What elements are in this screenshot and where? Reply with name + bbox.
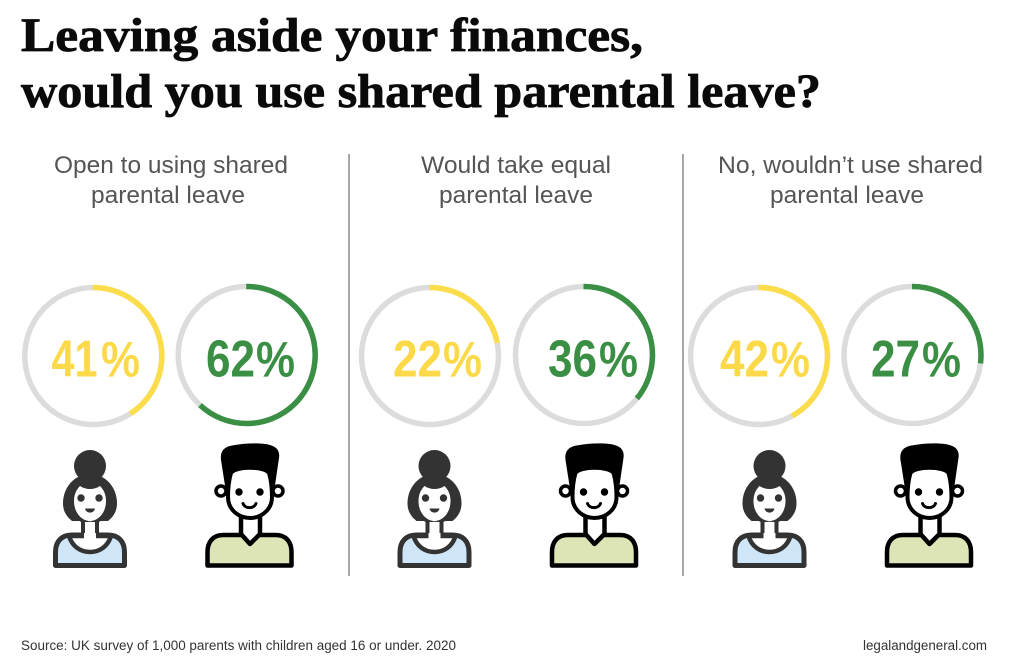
heading: wouldn't use: parental leave — [770, 182, 924, 209]
website: legalandgeneral.com — [863, 638, 987, 653]
panel: open to using shared parental leave — [25, 152, 315, 566]
donut: men 62% — [178, 286, 315, 424]
heading: equal leave: parental leave — [439, 182, 593, 209]
donut: women 42% — [690, 288, 828, 424]
panel: would not use shared parental leave — [690, 152, 983, 566]
heading: open to using: parental leave — [91, 182, 245, 209]
donut: men 36% — [516, 286, 652, 424]
donut: men 62%: 62 — [206, 330, 255, 388]
donut: men 27% — [844, 286, 981, 424]
icon: woman — [400, 450, 469, 566]
donut: men 36%: 36 — [548, 330, 597, 388]
donut: women 22%: % — [443, 332, 482, 388]
icon: man — [887, 443, 971, 566]
panel: would take equal parental leave — [362, 152, 652, 566]
heading: wouldn't use: No, wouldn’t use shared — [718, 152, 983, 179]
icon: woman — [56, 450, 124, 566]
donut: men 62%: % — [256, 332, 295, 388]
donut: men 27%: % — [922, 332, 961, 388]
donut: women 22% — [362, 288, 498, 424]
donut: men 27%: 27 — [871, 330, 920, 388]
donut: women 42%: 42 — [720, 330, 769, 388]
heading: open to using: Open to using shared — [54, 152, 288, 179]
icon: man — [552, 443, 636, 566]
title: would you use shared parental leave? — [21, 65, 821, 118]
title — [21, 9, 821, 118]
heading: equal leave — [421, 152, 611, 209]
icon: woman — [735, 450, 804, 566]
source note: Source: UK survey of 1,000 parents with children aged 16 or under. 2020 — [21, 638, 456, 653]
heading: wouldn't use — [718, 152, 983, 209]
donut: men 36%: % — [599, 332, 638, 388]
donut: women 41%: 41 — [52, 330, 98, 388]
title: Leaving aside your finances, — [21, 9, 643, 62]
donut: women 41% — [25, 288, 162, 424]
heading: open to using — [54, 152, 288, 209]
donut: women 42%: % — [771, 332, 810, 388]
heading: equal leave: Would take equal — [421, 152, 611, 179]
donut: women 41%: % — [101, 332, 140, 388]
donut: women 22%: 22 — [393, 330, 442, 388]
icon: man — [208, 443, 292, 566]
